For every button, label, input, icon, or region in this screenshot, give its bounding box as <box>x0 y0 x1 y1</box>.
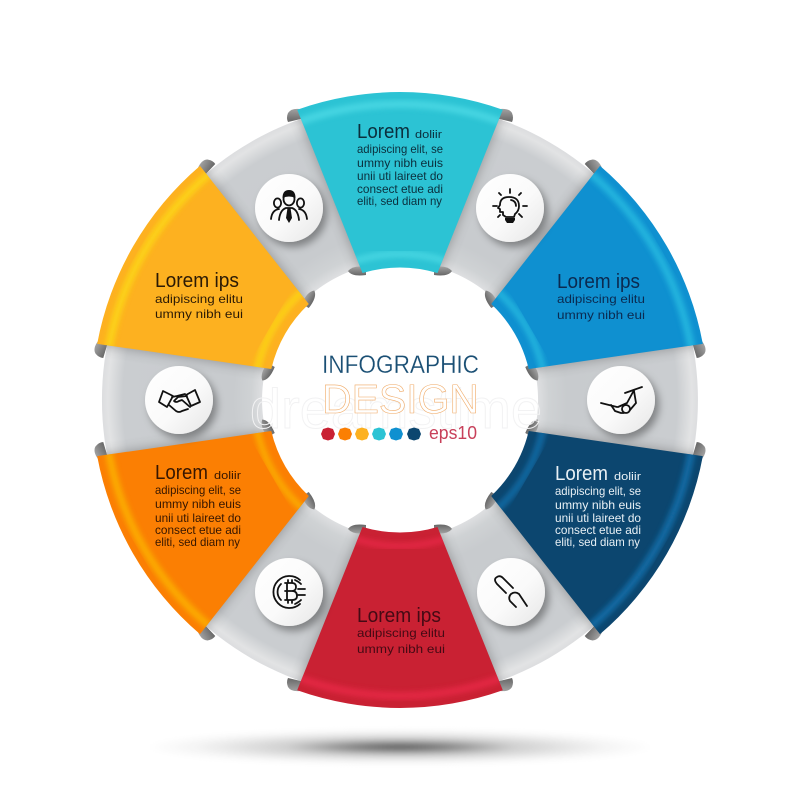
text block: yellow segment: Lorem ips <box>155 270 239 292</box>
segment shadows on ring <box>97 110 703 690</box>
text block: teal segment: doliir <box>415 129 442 141</box>
text block: blue segment: adipiscing elitu <box>557 292 645 306</box>
icon: chain <box>477 558 545 626</box>
hexagon dots <box>321 428 421 440</box>
text block: navy segment: consect etue adi <box>555 523 641 537</box>
text block: red segment: ummy nibh eui <box>357 642 445 656</box>
text block: red segment: adipiscing elitu <box>357 626 445 640</box>
text block: teal segment: unii uti laireet do <box>357 169 443 183</box>
text block: yellow segment: adipiscing elitu <box>155 292 243 306</box>
icon: bitcoin <box>255 558 323 626</box>
text block: teal segment: adipiscing elit, se <box>357 142 443 156</box>
text block: orange segment <box>155 462 241 549</box>
title: infographic design: INFOGRAPHIC <box>322 351 479 379</box>
text block: navy segment: eliti, sed diam ny <box>555 535 640 549</box>
icon: handshake outline right <box>587 366 655 434</box>
text block: orange segment: adipiscing elit, se <box>155 483 241 497</box>
text block: orange segment: eliti, sed diam ny <box>155 535 240 549</box>
text block: orange segment: unii uti laireet do <box>155 511 241 525</box>
segment: red <box>287 524 513 708</box>
icon: light bulb <box>476 174 544 242</box>
text block: yellow segment: ummy nibh eui <box>155 307 243 321</box>
text block: orange segment: ummy nibh euis <box>155 497 241 511</box>
text block: orange segment: consect etue adi <box>155 523 241 537</box>
text block: teal segment: eliti, sed diam ny <box>357 194 442 208</box>
grey ring <box>102 102 698 698</box>
text block: orange segment: Lorem <box>155 462 208 484</box>
text block: navy segment <box>555 463 641 549</box>
segment: blue <box>484 160 706 380</box>
ground shadow <box>145 729 655 765</box>
text block: yellow segment <box>155 270 243 321</box>
text block: teal segment: ummy nibh euis <box>357 156 443 170</box>
watermark: dreamstime <box>250 377 542 440</box>
label: eps10: eps10 <box>429 423 477 443</box>
segment: yellow <box>94 160 316 380</box>
icon: handshake <box>145 366 213 434</box>
text block: teal segment: Lorem <box>357 121 410 143</box>
text block: red segment <box>357 605 445 656</box>
segment: navy <box>484 420 706 640</box>
text block: blue segment: Lorem ips <box>557 271 640 293</box>
text block: navy segment: doliir <box>614 471 641 483</box>
text block: blue segment: ummy nibh eui <box>557 308 645 322</box>
title: infographic design <box>322 351 479 422</box>
text block: navy segment: unii uti laireet do <box>555 511 641 525</box>
segment: teal <box>287 92 513 276</box>
title: infographic design: DESIGN <box>322 376 479 422</box>
segment: orange <box>94 420 316 640</box>
text block: orange segment: doliir <box>214 470 241 482</box>
icon: team <box>255 174 323 242</box>
text block: blue segment <box>557 271 645 322</box>
text block: navy segment: Lorem <box>555 463 608 485</box>
text block: navy segment: adipiscing elit, se <box>555 484 641 498</box>
text block: teal segment <box>357 121 443 208</box>
text block: teal segment: consect etue adi <box>357 182 443 196</box>
text block: navy segment: ummy nibh euis <box>555 498 641 512</box>
text block: red segment: Lorem ips <box>357 605 441 627</box>
